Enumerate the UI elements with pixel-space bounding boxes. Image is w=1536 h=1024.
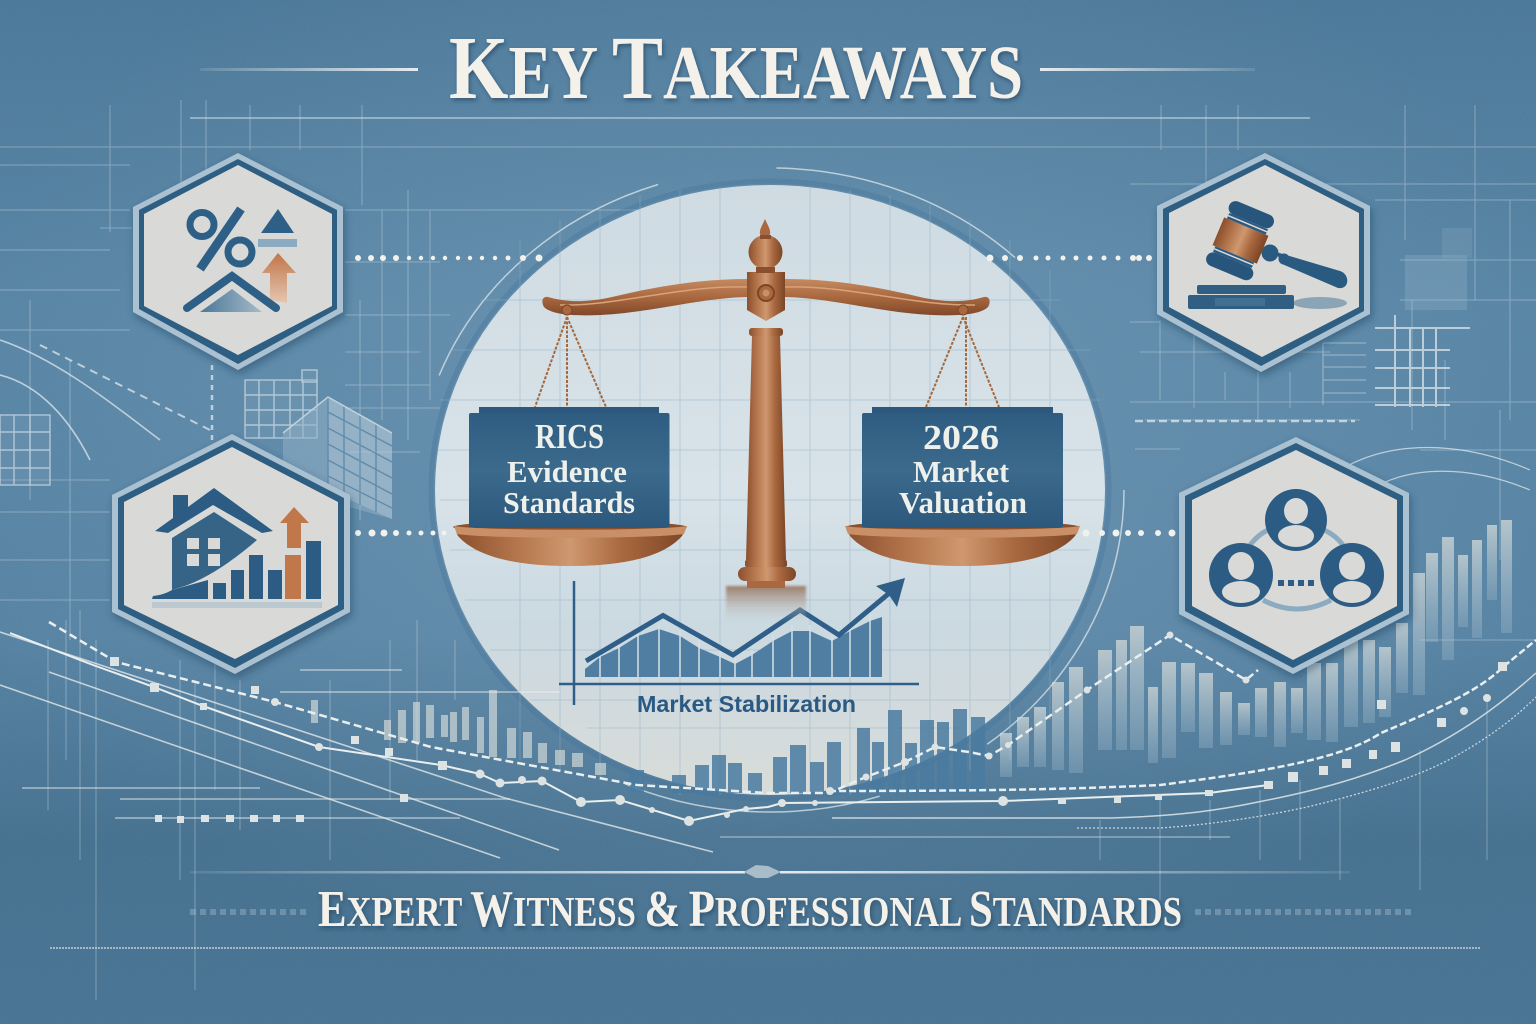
scale pivot block: [747, 272, 785, 321]
right box label: Market: [913, 454, 1010, 489]
trend lines: [0, 622, 1536, 858]
scale beam: [542, 279, 990, 315]
connector dots: lower right: [1082, 530, 1176, 536]
right box label: 2026: [923, 418, 999, 457]
icon: house with rising bars: [152, 488, 322, 608]
chart trend arrow: [586, 590, 893, 661]
panel: people network hexagon: [1179, 437, 1409, 674]
building: left cluster: [0, 370, 317, 485]
left box label: Standards: [503, 485, 635, 520]
right box label: [899, 418, 1027, 520]
market stabilization chart: [559, 578, 919, 717]
left box label: Evidence: [507, 454, 627, 489]
panel: gavel hexagon: [1157, 153, 1370, 372]
bars right: [1000, 520, 1512, 777]
panel: rate icon hexagon: [133, 153, 343, 370]
building: perspective tower: [283, 397, 392, 519]
base glow: [726, 586, 806, 622]
central circle: [416, 168, 1124, 812]
scale pins: [562, 305, 572, 315]
scale finial: [760, 219, 770, 236]
icon: percent with roof and arrows: [187, 209, 297, 312]
left box label: [503, 417, 635, 520]
chart label: Market Stabilization: [637, 691, 856, 717]
footer heading: EXPERT WITNESS & PROFESSIONAL STANDARDS: [318, 881, 1182, 938]
title rule lines: [190, 68, 1310, 118]
balance scale: [453, 219, 1080, 622]
right box label: Valuation: [899, 485, 1027, 520]
trend markers: [110, 632, 1507, 826]
bars left: [311, 690, 606, 775]
scale column: [738, 328, 796, 588]
person: top: [1265, 489, 1327, 551]
person: right: [1320, 543, 1384, 607]
chart axes: [559, 581, 919, 705]
chart area bars: [585, 617, 882, 677]
connector dots: lower left: [355, 530, 446, 536]
left pan with box: [453, 407, 687, 566]
circle grid: [438, 188, 1105, 795]
scale chains: [535, 317, 999, 407]
bottom bar charts: [311, 520, 1512, 793]
background buildings: [0, 228, 1472, 519]
panel: housing market hexagon: [112, 434, 350, 674]
title: KEY TAKEAWAYS: [449, 19, 1023, 118]
bars inside circle: [630, 709, 985, 793]
left box label: RICS: [535, 417, 604, 456]
icon: three connected people: [1209, 489, 1384, 609]
footer ornament: [50, 837, 1480, 948]
connector dots: top left: [355, 254, 542, 262]
person: left: [1209, 543, 1273, 607]
right pan with box: [845, 407, 1080, 566]
building: right cluster: [1323, 228, 1472, 407]
connector dots: top right: [986, 254, 1152, 262]
icon: gavel: [1188, 199, 1347, 309]
dashed guide lines: [0, 340, 1530, 490]
